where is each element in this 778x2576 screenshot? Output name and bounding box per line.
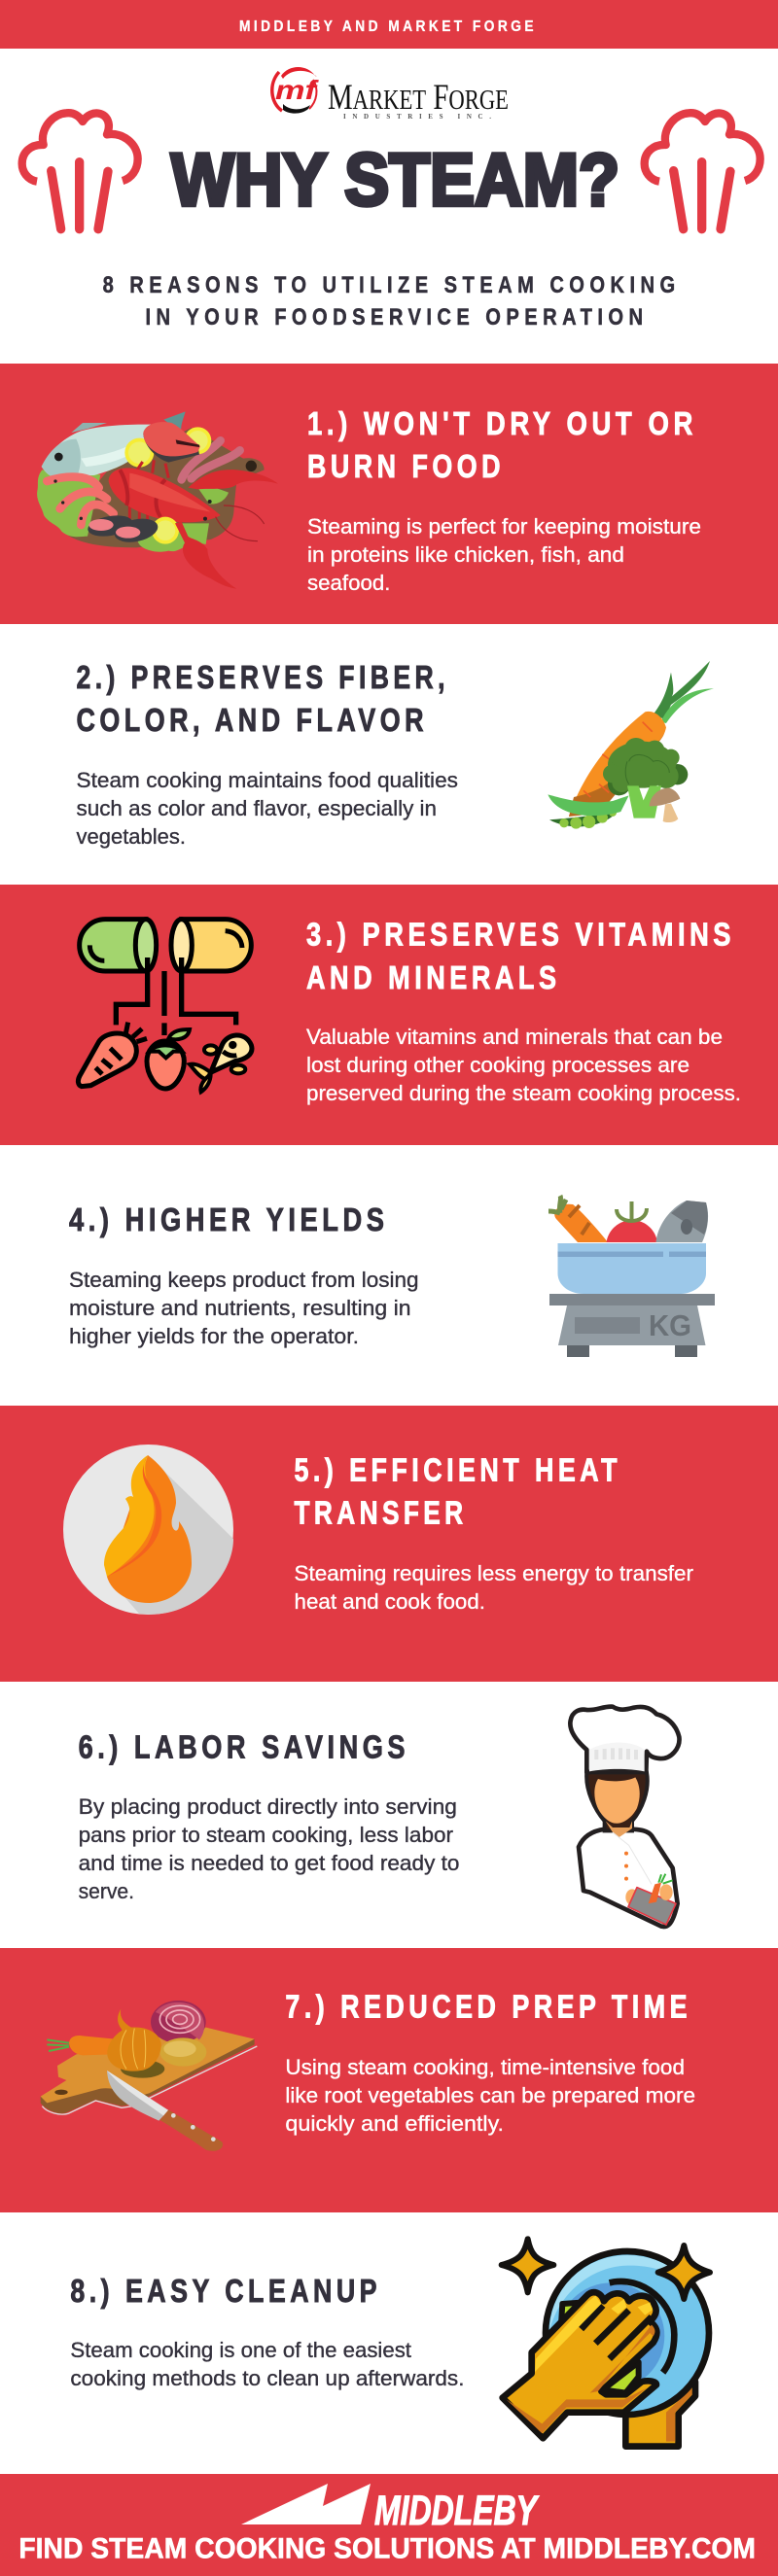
header band text: MIDDLEBY AND MARKET FORGE [239, 18, 537, 35]
body text: reason 1 [307, 514, 701, 595]
heading: reason 1: BURN FOOD [307, 448, 505, 484]
heading: reason 8: 8.) EASY CLEANUP [70, 2273, 381, 2309]
title: WHY STEAM? [171, 139, 619, 222]
logo: Middleby: MIDDLEBY [374, 2488, 539, 2534]
body text: reason 2: such as color and flavor, especially in [76, 796, 437, 820]
body text: reason 7: like root vegetables can be prepared more [285, 2083, 695, 2107]
body text: reason 7 [285, 2055, 695, 2136]
body text: reason 5 [294, 1561, 694, 1614]
body text: reason 8: Steam cooking is one of the easiest [70, 2338, 412, 2362]
body text: reason 3 [306, 1025, 741, 1105]
heading: reason 5: TRANSFER [294, 1495, 467, 1530]
heading: reason 2 [76, 659, 449, 738]
heading: reason 7: 7.) REDUCED PREP TIME [285, 1989, 691, 2024]
body text: reason 4 [69, 1268, 419, 1348]
body text: reason 8 [70, 2338, 465, 2390]
icon: cutting board with vegetables [41, 2001, 257, 2151]
body text: reason 6: serve. [79, 1879, 134, 1903]
panel: reason 1 [0, 364, 778, 624]
body text: reason 1: Steaming is perfect for keeping moisture [307, 514, 701, 539]
icon: chef hat steam left [22, 113, 138, 229]
panel: reason 7 [0, 1948, 778, 2212]
body text: reason 4: higher yields for the operator. [69, 1324, 359, 1348]
icon: vitamin capsule [78, 920, 252, 1092]
panel: reason 2 [76, 659, 714, 849]
body text: reason 7: quickly and efficiently. [285, 2111, 504, 2136]
icon: food on a scale [548, 1196, 715, 1357]
subtitle: 8 REASONS TO UTILIZE STEAM COOKING [103, 272, 681, 298]
body text: reason 4: moisture and nutrients, resulting in [69, 1296, 410, 1320]
logo: Market Forge: MARKET FORGE [328, 78, 509, 118]
body text: reason 6 [79, 1794, 459, 1903]
icon: chef [570, 1707, 680, 1927]
icon: seafood platter [37, 411, 278, 589]
body text: reason 2: vegetables. [76, 824, 186, 849]
body text: reason 7: Using steam cooking, time-intensive food [285, 2055, 685, 2079]
footer band [0, 2474, 778, 2576]
body text: reason 6: By placing product directly into serving [79, 1794, 457, 1819]
body text: reason 5: heat and cook food. [294, 1589, 485, 1614]
logo: Market Forge [272, 67, 509, 121]
heading: reason 4: 4.) HIGHER YIELDS [69, 1201, 389, 1237]
body text: reason 5: Steaming requires less energy to transfer [294, 1561, 694, 1585]
body text: reason 3: lost during other cooking processes are [306, 1053, 690, 1077]
heading: reason 2: COLOR, AND FLAVOR [76, 702, 428, 738]
body text: reason 2: Steam cooking maintains food qualities [76, 768, 458, 792]
body text: reason 3: preserved during the steam cooking process. [306, 1081, 741, 1105]
panel: reason 5 [0, 1406, 778, 1682]
panel: reason 8 [70, 2239, 710, 2447]
subtitle: IN YOUR FOODSERVICE OPERATION [146, 304, 648, 331]
heading: reason 5 [294, 1452, 621, 1530]
body text: reason 1: in proteins like chicken, fish, and [307, 542, 624, 567]
header band [0, 0, 778, 49]
icon: flame [63, 1445, 233, 1615]
logo: Market Forge: INDUSTRIES INC. [343, 113, 491, 121]
body text: reason 1: seafood. [307, 571, 391, 595]
body text: reason 2 [76, 768, 458, 849]
footer call to action: FIND STEAM COOKING SOLUTIONS AT MIDDLEBY.COM [18, 2533, 756, 2564]
heading: reason 6: 6.) LABOR SAVINGS [79, 1729, 409, 1765]
panel: reason 6 [79, 1707, 680, 1927]
body text: reason 3: Valuable vitamins and minerals that can be [306, 1025, 723, 1049]
logo: Market Forge: mf [275, 75, 319, 105]
panel: reason 3 [0, 885, 778, 1145]
logo: Middleby [241, 2484, 539, 2534]
heading: reason 1 [307, 405, 697, 484]
heading: reason 5: 5.) EFFICIENT HEAT [294, 1452, 621, 1488]
panel: reason 4 [69, 1196, 715, 1357]
heading: reason 3 [306, 916, 735, 995]
body text: reason 6: and time is needed to get food ready to [79, 1851, 459, 1875]
heading: reason 3: AND MINERALS [306, 959, 560, 995]
body text: reason 4: Steaming keeps product from losing [69, 1268, 419, 1292]
body text: reason 8: cooking methods to clean up afterwards. [70, 2366, 465, 2390]
subtitle [103, 272, 681, 331]
heading: reason 2: 2.) PRESERVES FIBER, [76, 659, 449, 695]
icon: food on a scale: KG [649, 1308, 691, 1342]
icon: chef hat steam right [645, 113, 760, 229]
icon: vegetables [548, 661, 714, 829]
heading: reason 1: 1.) WON'T DRY OUT OR [307, 405, 697, 441]
icon: gloved hand cleaning a plate [502, 2239, 710, 2447]
body text: reason 6: pans prior to steam cooking, less labor [79, 1823, 453, 1847]
